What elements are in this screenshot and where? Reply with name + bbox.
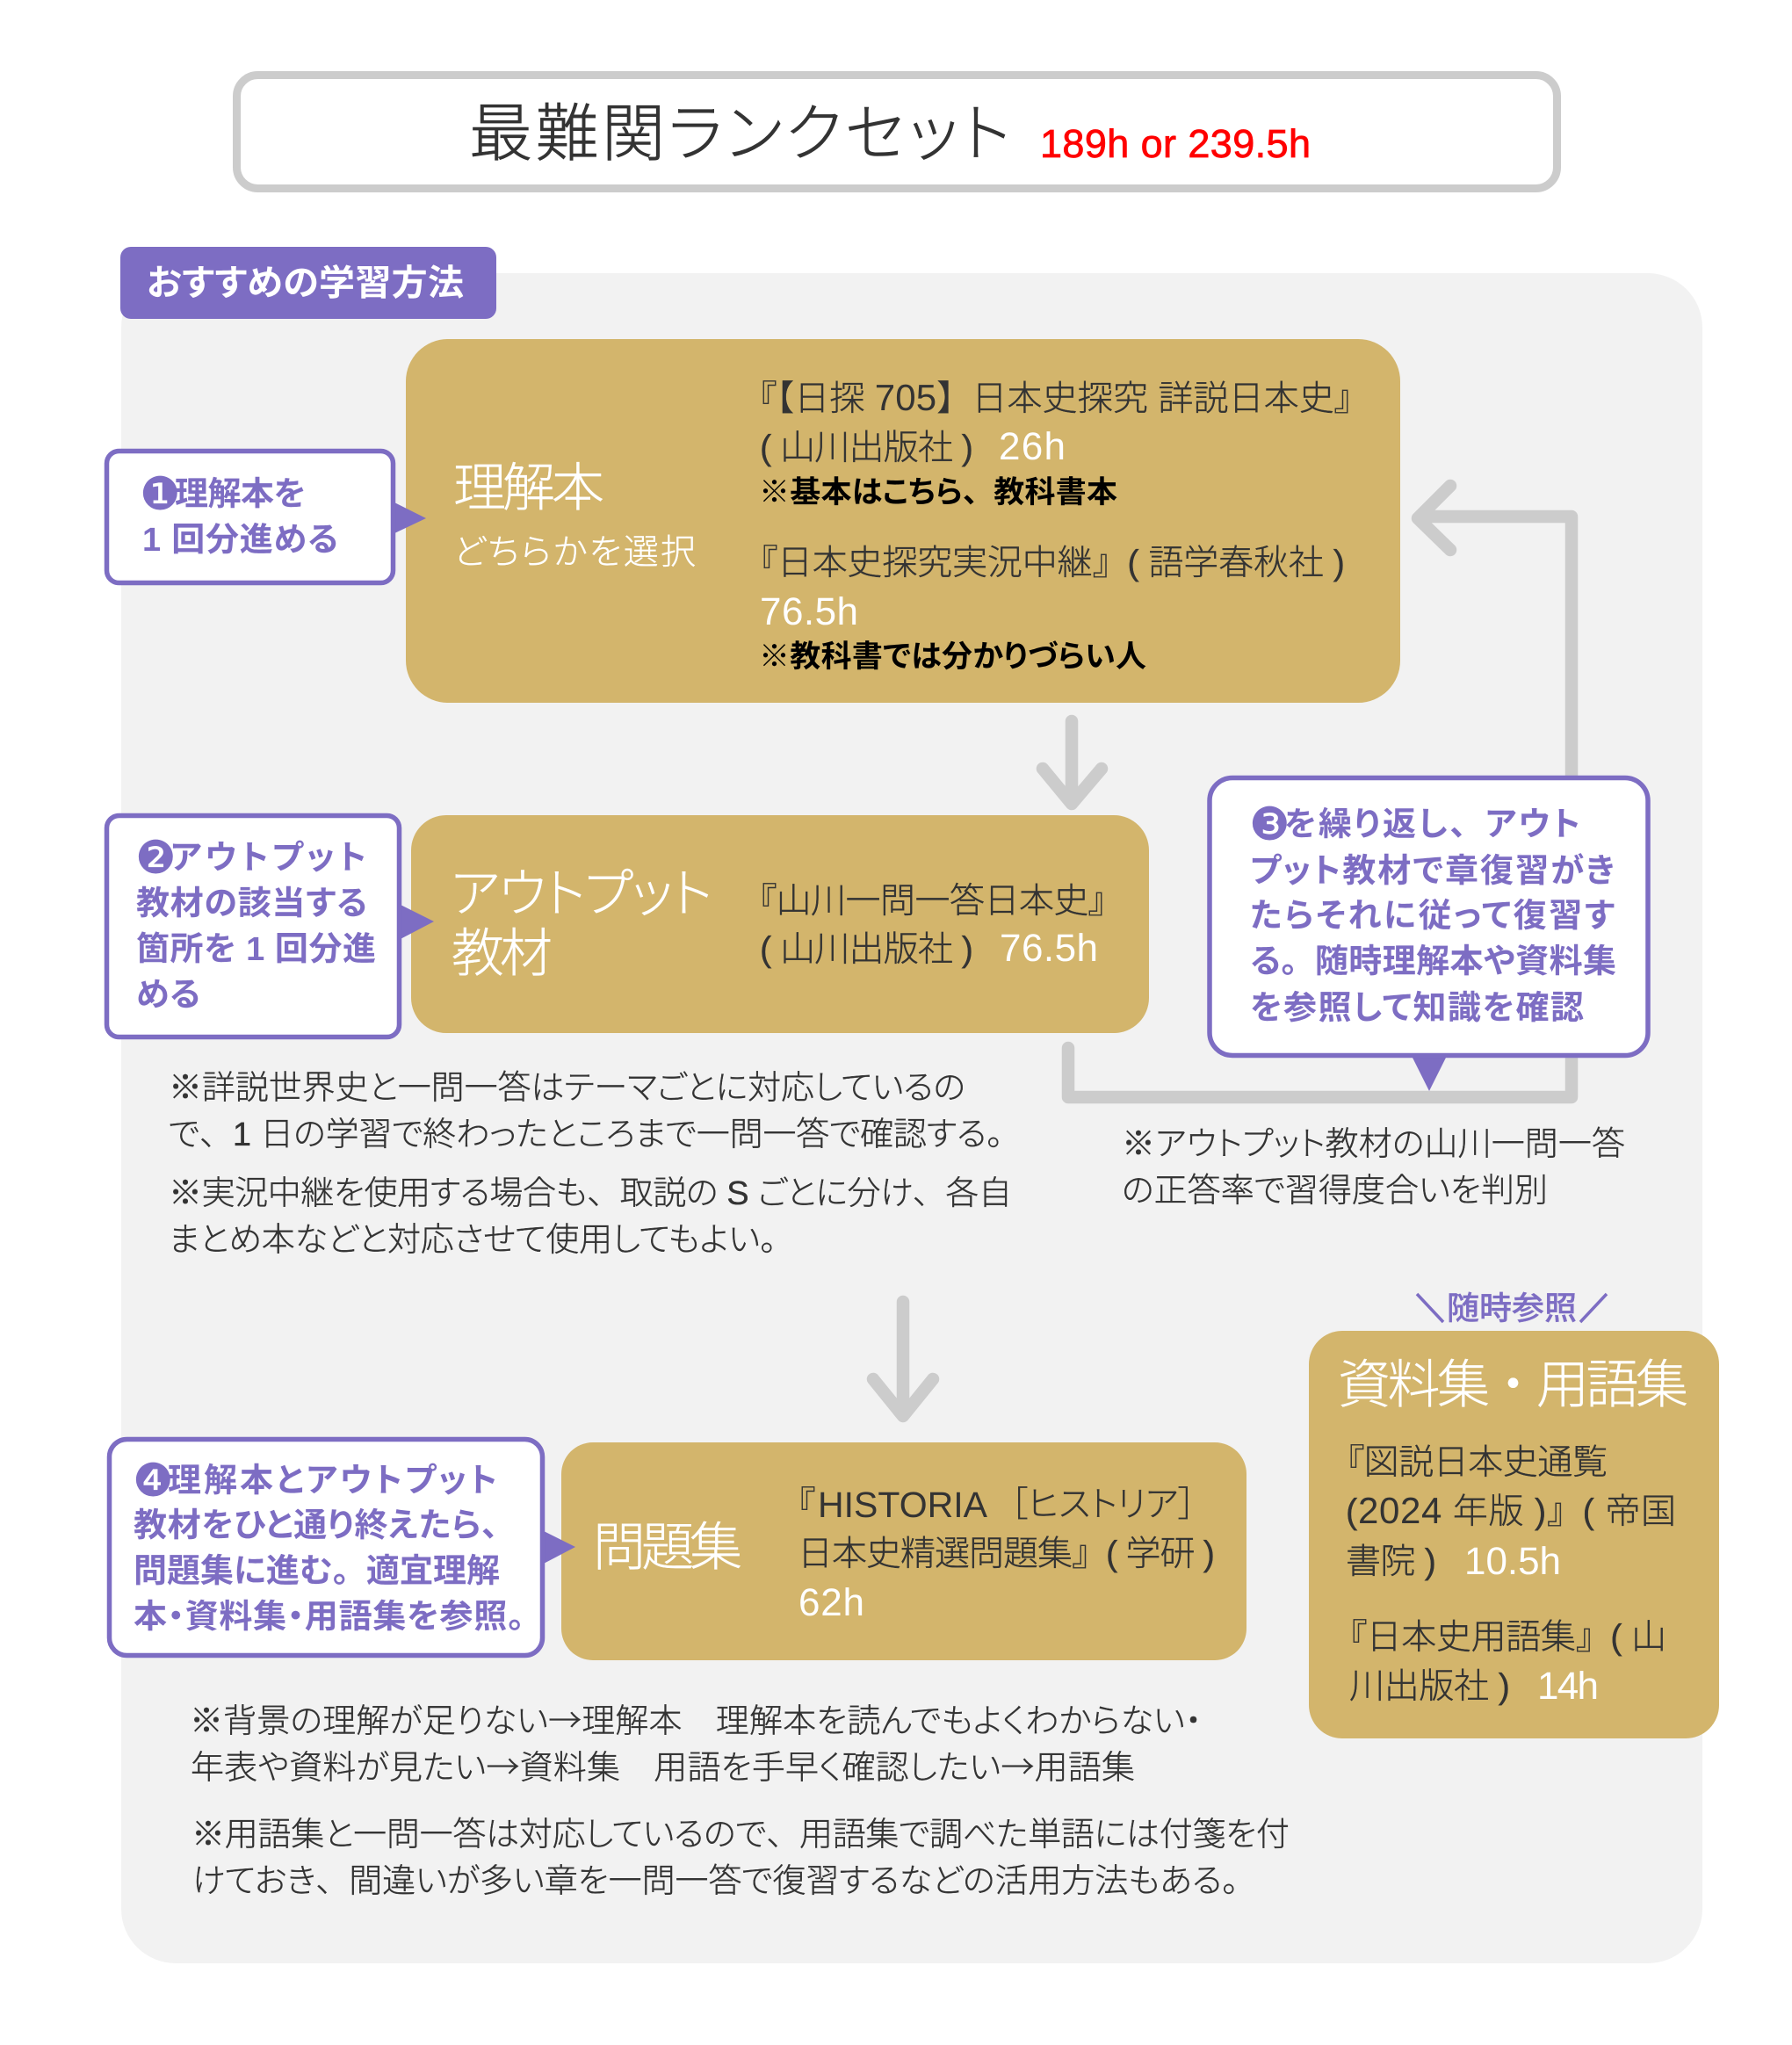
panel: output material: 教材 <box>452 924 553 983</box>
book 1: 26h <box>999 425 1066 468</box>
heading: reference book and glossary: 資料集・用語集 <box>1338 1342 1688 1419</box>
book: HISTORIA: 『 <box>798 1485 815 1524</box>
callout: step 2: 教材の該当する <box>136 885 367 922</box>
callout: step 2: める <box>136 977 200 1014</box>
callout: step 3: プット教材で章復習がき <box>1250 853 1615 890</box>
book: reference atlas: 10.5h <box>1464 1540 1561 1583</box>
notes under output material: ※詳説世界史と一問一答はテーマごとに対応しているの <box>169 1070 965 1107</box>
book: reference atlas <box>1346 1443 1676 1583</box>
heading: workbook: 問題集 <box>593 1518 742 1577</box>
callout: step 4: 教材をひと通り終えたら、 <box>134 1498 515 1546</box>
book: Yamakawa question book: ( 山川出版社 ) <box>760 930 973 969</box>
callout: step 4: ❹ <box>133 1455 174 1507</box>
heading: output material: アウトプット <box>451 864 712 923</box>
notes under output material: ※実況中継を使用する場合も、取説の S ごとに分け、各自 <box>169 1166 1012 1214</box>
heading: comprehension book: 理解本 <box>453 459 604 517</box>
note: judging mastery: ※アウトプット教材の山川一問一答 <box>1122 1126 1625 1163</box>
book 2: ※教科書では分かりづらい人 <box>759 640 1146 674</box>
book 2 <box>759 534 1345 674</box>
callout: step 2: アウトプット <box>170 840 366 877</box>
callout: step 4: 理解本とアウトプット <box>168 1463 497 1499</box>
note: judging mastery <box>1122 1126 1625 1210</box>
notes under workbook: けておき、間違いが多い章を一問一答で復習するなどの活用方法もある。 <box>192 1854 1239 1902</box>
panel: reference book and glossary <box>1309 1331 1719 1738</box>
notes under workbook <box>190 1694 1290 1902</box>
book: HISTORIA: ［ヒストリア］ <box>1010 1485 1196 1524</box>
callout: step 1: ❶ <box>140 468 181 521</box>
note: judging mastery: の正答率で習得度合いを判別 <box>1122 1173 1548 1210</box>
callout: step 3: る。随時理解本や資料集 <box>1250 934 1616 982</box>
callout: step 2: 箇所を 1 回分進 <box>136 931 376 968</box>
notes under output material: まとめ本などと対応させて使用してもよい。 <box>169 1222 777 1259</box>
book: HISTORIA: HISTORIA <box>818 1485 988 1525</box>
panel: workbook <box>561 1442 1246 1660</box>
callout: step 3 <box>1210 778 1648 1091</box>
book: Yamakawa question book: 『山川一問一答日本史』 <box>759 882 1106 921</box>
callout: step 4: 本・資料集・用語集を参照。 <box>134 1599 524 1636</box>
subheading: choose one: どちらかを選択 <box>453 533 696 572</box>
book 1: 『【日探 705】日本史探究 詳説日本史』 <box>759 370 1352 421</box>
notes under output material <box>169 1070 1012 1259</box>
loop arrow back to comprehension book <box>1068 486 1572 1097</box>
book 2: 76.5h <box>760 590 858 633</box>
callout: step 3: を参照して知識を確認 <box>1250 990 1584 1027</box>
heading tab: recommended study method: おすすめの学習方法 <box>147 263 464 303</box>
book: reference atlas: 『図説日本史通覧 <box>1347 1443 1608 1482</box>
callout: step 3: たらそれに従って復習す <box>1250 898 1615 935</box>
label: refer as needed: 随時参照 <box>1447 1290 1577 1326</box>
title box <box>237 76 1557 188</box>
book: HISTORIA <box>798 1485 1215 1624</box>
panel: comprehension book <box>406 339 1400 703</box>
book 2: 『日本史探究実況中継』( 語学春秋社 ) <box>760 534 1345 585</box>
arrow: output to workbook <box>873 1302 933 1416</box>
callout: step 2 <box>107 815 434 1037</box>
title text: 最難関ランクセット <box>469 99 1010 170</box>
label: refer as needed <box>1417 1290 1607 1326</box>
callout: step 1 <box>107 452 426 583</box>
book 1: ※基本はこちら、教科書本 <box>759 467 1117 512</box>
arrow: comprehension to output <box>1043 721 1102 804</box>
callout: step 1: 1 回分進める <box>142 522 338 559</box>
notes under output material: で、1 日の学習で終わったところまで一問一答で確認する。 <box>169 1107 1003 1155</box>
callout: step 3: ❸ <box>1249 798 1290 851</box>
book: glossary: 『日本史用語集』( 山 <box>1349 1608 1666 1659</box>
callout: step 4: 問題集に進む。適宜理解 <box>134 1543 500 1592</box>
book: glossary <box>1349 1608 1666 1708</box>
panel: output material <box>411 815 1149 1033</box>
book 1 <box>759 370 1352 512</box>
book: glossary: 14h <box>1537 1665 1599 1708</box>
callout: step 1: 理解本を <box>175 476 306 513</box>
callout: step 4 <box>109 1439 575 1655</box>
notes under workbook: ※用語集と一問一答は対応しているので、用語集で調べた単語には付箋を付 <box>191 1807 1290 1855</box>
book: reference atlas: 書院 ) <box>1346 1543 1436 1581</box>
book: HISTORIA: 62h <box>798 1581 864 1624</box>
book 1: ( 山川出版社 ) <box>760 429 973 467</box>
notes under workbook: 年表や資料が見たい→資料集 用語を手早く確認したい→用語集 <box>191 1740 1135 1788</box>
total hours: 189h or 239.5h <box>1040 121 1311 166</box>
book: HISTORIA: 日本史精選問題集』( 学研 ) <box>798 1525 1215 1576</box>
panel: study method background <box>121 273 1702 1963</box>
book: Yamakawa question book: 76.5h <box>1000 927 1098 970</box>
heading tab: recommended study method <box>120 247 496 319</box>
callout: step 3: を繰り返し、アウト <box>1284 797 1580 845</box>
book: reference atlas: (2024 年版 )』( 帝国 <box>1346 1483 1676 1534</box>
book: Yamakawa question book <box>759 882 1106 970</box>
notes under workbook: ※背景の理解が足りない→理解本 理解本を読んでもよくわからない・ <box>190 1694 1202 1742</box>
book: glossary: 川出版社 ) <box>1349 1667 1510 1706</box>
callout: step 2: ❷ <box>135 832 177 885</box>
